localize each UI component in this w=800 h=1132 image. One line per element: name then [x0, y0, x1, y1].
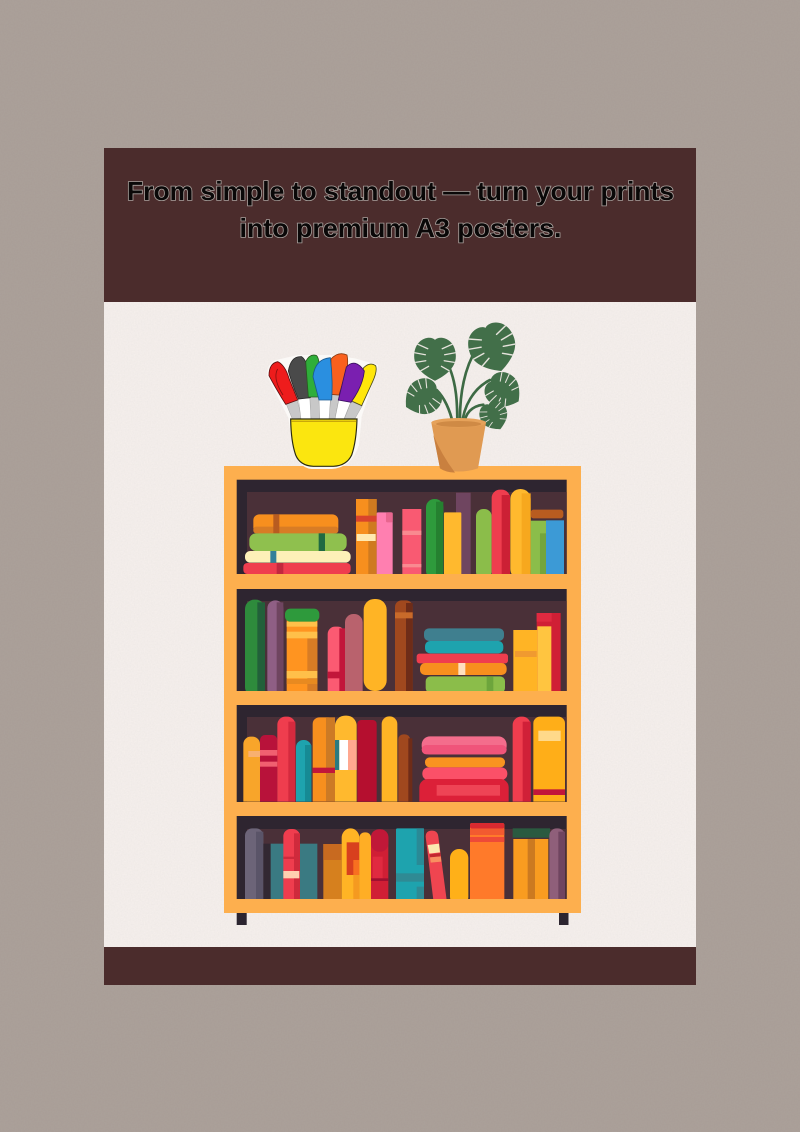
- books: second shelf: [245, 599, 561, 691]
- title: From simple to standout — turn your prints: [127, 176, 674, 206]
- marker: yellow: [352, 364, 376, 406]
- upright books bottom shelf left: [245, 828, 424, 899]
- upright books third shelf right: [512, 716, 565, 802]
- marker: green: [306, 355, 321, 397]
- marker cup: [267, 354, 378, 469]
- white sticker halo: [267, 355, 378, 469]
- shelf backs: [237, 480, 567, 899]
- leaf: upper right: [457, 312, 528, 382]
- marker: purple: [338, 363, 364, 402]
- title: into premium A3 posters.: [240, 213, 562, 243]
- upright books third shelf left: [243, 716, 412, 802]
- upright books top shelf: [356, 489, 564, 580]
- slanted book: [426, 831, 447, 900]
- marker: orange: [330, 354, 348, 395]
- book stack top shelf: [243, 514, 351, 574]
- yellow cup: [291, 419, 357, 466]
- header band: [104, 148, 696, 302]
- book stack third shelf: [419, 736, 509, 809]
- upright books second shelf right: [513, 613, 561, 700]
- upright books second shelf left: [245, 599, 413, 691]
- title: [127, 176, 674, 243]
- books: top shelf: [243, 489, 564, 580]
- shelf frame: [224, 466, 581, 913]
- books: bottom shelf: [245, 823, 565, 899]
- leaf: upper left: [410, 334, 460, 382]
- plant stems: [437, 348, 490, 425]
- upright books bottom shelf right: [450, 823, 565, 899]
- marker: red: [269, 362, 298, 404]
- marker: blue: [313, 358, 332, 400]
- leaf: lower right: [472, 394, 516, 437]
- shelf legs: [237, 912, 568, 925]
- leaf: lower left: [394, 369, 451, 426]
- bookshelf: [224, 466, 581, 925]
- plant pot: [431, 418, 486, 473]
- poster panel: [104, 302, 696, 947]
- book stack second shelf: [417, 628, 508, 693]
- footer band: [104, 947, 696, 985]
- marker barrels: [286, 394, 362, 420]
- potted plant: [394, 312, 532, 473]
- books: third shelf: [243, 716, 565, 802]
- marker: black: [288, 357, 310, 399]
- leaf: right: [475, 362, 532, 419]
